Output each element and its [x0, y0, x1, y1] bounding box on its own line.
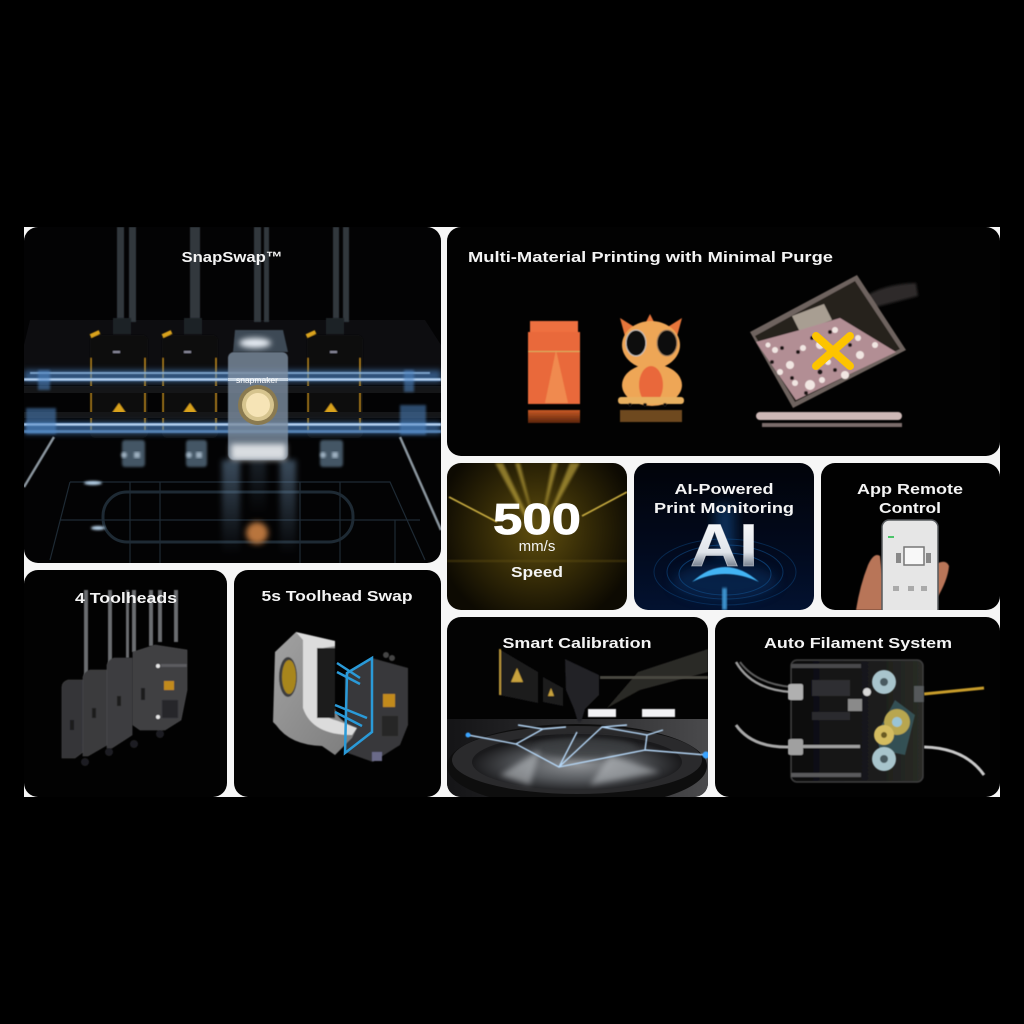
brand label: snapmaker: [236, 375, 278, 385]
background toolheads: [499, 649, 563, 706]
heading: auto filament: Auto Filament System: [764, 635, 952, 652]
panel: auto filament system: [715, 617, 1000, 797]
blue alignment frame and bars: [335, 658, 372, 753]
heading: 5s swap: 5s Toolhead Swap: [262, 588, 412, 605]
blue glints: [84, 481, 105, 530]
heading: smart calibration: Smart Calibration: [502, 635, 652, 652]
speed unit: mm/s: [519, 538, 555, 555]
white backing sheet: [24, 227, 1000, 797]
light bars: [588, 709, 675, 717]
rails: [24, 372, 441, 433]
hand holding phone: [856, 555, 949, 610]
vertical light beam: [716, 505, 734, 555]
rail glow: [24, 370, 441, 434]
side rays: [449, 492, 627, 522]
heading: 4 toolheads: 4 Toolheads: [75, 590, 177, 607]
panel: SnapSwap: [24, 227, 441, 563]
AI heading: AI-Powered: [674, 481, 774, 498]
timing belts: [24, 386, 441, 418]
purge box: [750, 275, 918, 427]
dragon figurine: [618, 314, 684, 422]
faint horizontal glow: [447, 560, 627, 562]
infographic canvas: [24, 227, 1000, 797]
app heading: Control: [879, 500, 941, 517]
active transparent toolhead: [228, 330, 288, 460]
transparent housing: [788, 660, 924, 782]
toolhead plates: [62, 645, 187, 766]
speed value: 500: [493, 495, 581, 544]
nozzle carriage: [565, 659, 599, 722]
blue mesh lines: [468, 725, 706, 767]
spilled purge: [756, 412, 902, 420]
filament tubes: [736, 662, 984, 775]
AI heading: [654, 481, 794, 517]
machine back wall: [24, 320, 441, 385]
bed circuit pattern: [50, 482, 425, 563]
panel: AI monitoring: [634, 463, 814, 610]
app heading: [857, 481, 963, 517]
vertical tubes: [84, 590, 178, 682]
panel: speed: [447, 463, 627, 610]
panel: app remote control: [821, 463, 1000, 616]
rail end brackets: [26, 370, 426, 435]
gantry arm: [607, 649, 708, 708]
speed label: Speed: [511, 564, 563, 581]
white swap dock: [273, 632, 357, 755]
heading: multi-material: Multi-Material Printing with Minimal Purge: [468, 249, 833, 266]
AI heading: Print Monitoring: [654, 500, 794, 517]
lower nozzle parts: [122, 440, 343, 467]
mesh end points: [466, 732, 710, 758]
calibration dish: [447, 724, 707, 808]
toolhead body: [345, 652, 408, 762]
gold light rays: [495, 463, 580, 525]
icon: yellow cross: [816, 336, 850, 366]
orange bed glow: [246, 522, 268, 544]
gears: [872, 670, 915, 771]
floor: [447, 719, 708, 797]
blue ripple rings: [654, 539, 796, 605]
panel: smart calibration: [447, 617, 710, 808]
toolhead row: [90, 318, 363, 438]
bright blue arc: [692, 567, 759, 582]
large AI lettering: AI: [690, 512, 758, 579]
orange purge tower: [528, 321, 580, 423]
panel: 4 toolheads: [24, 570, 227, 797]
frame rails around bed: [24, 437, 441, 530]
bowden tubes: [117, 227, 349, 322]
dial: [238, 385, 278, 425]
phone: [882, 520, 938, 616]
light reflection beams: [222, 460, 296, 555]
panel: 5s toolhead swap: [234, 570, 441, 797]
app heading: App Remote: [857, 481, 963, 498]
heading: SnapSwap: SnapSwap™: [182, 249, 282, 266]
panel: multi-material printing: [447, 227, 1000, 456]
hand: [866, 283, 918, 308]
